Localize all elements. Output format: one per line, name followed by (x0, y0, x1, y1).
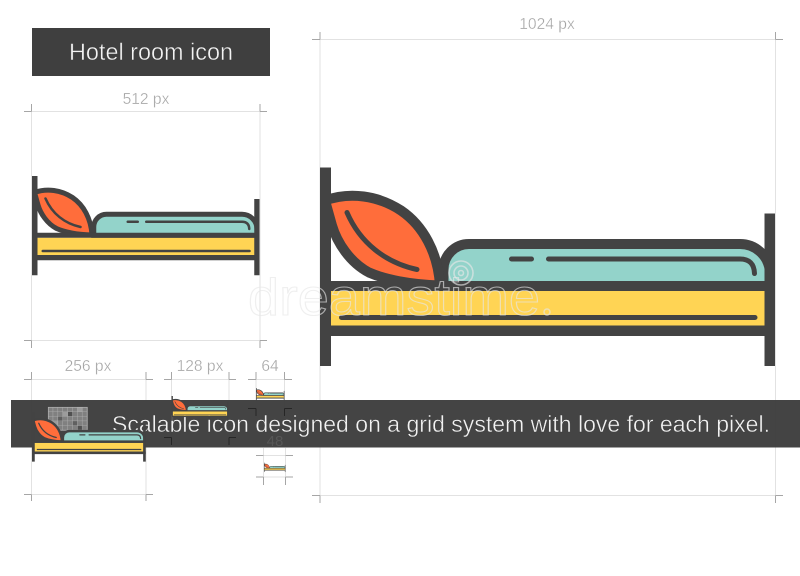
size guide: 512 px (24, 91, 267, 348)
icon: bed 48 px (264, 463, 285, 472)
icon: pixel grid (48, 407, 87, 430)
size guide: 1024 px: 1024 px (519, 16, 575, 33)
banner: 48 (267, 433, 283, 450)
size guide: 128 px (164, 358, 236, 445)
icon: bed 256 px (32, 412, 146, 462)
size guide: 256 px: 256 px (65, 358, 112, 375)
banner (11, 400, 800, 450)
icon: bed 64 px (256, 388, 284, 400)
watermark: dreamstime (248, 269, 540, 327)
icon: bed 128 px (172, 396, 228, 421)
size guide: 128 px: 128 px (177, 358, 224, 375)
title: Hotel room icon (69, 39, 233, 66)
title (32, 28, 270, 76)
size guide: 64 px (248, 358, 292, 416)
size guide: 64 px: 64 (261, 358, 279, 375)
size guide: 48 px (256, 448, 293, 485)
icon: bed 512 px (32, 176, 260, 275)
size guide: 512 px: 512 px (123, 91, 170, 108)
size guide: 256 px (24, 358, 153, 501)
icon: large bed 1024 px (320, 168, 775, 366)
banner: Scalable icon designed on a grid system with love for each pixel. (112, 411, 770, 437)
